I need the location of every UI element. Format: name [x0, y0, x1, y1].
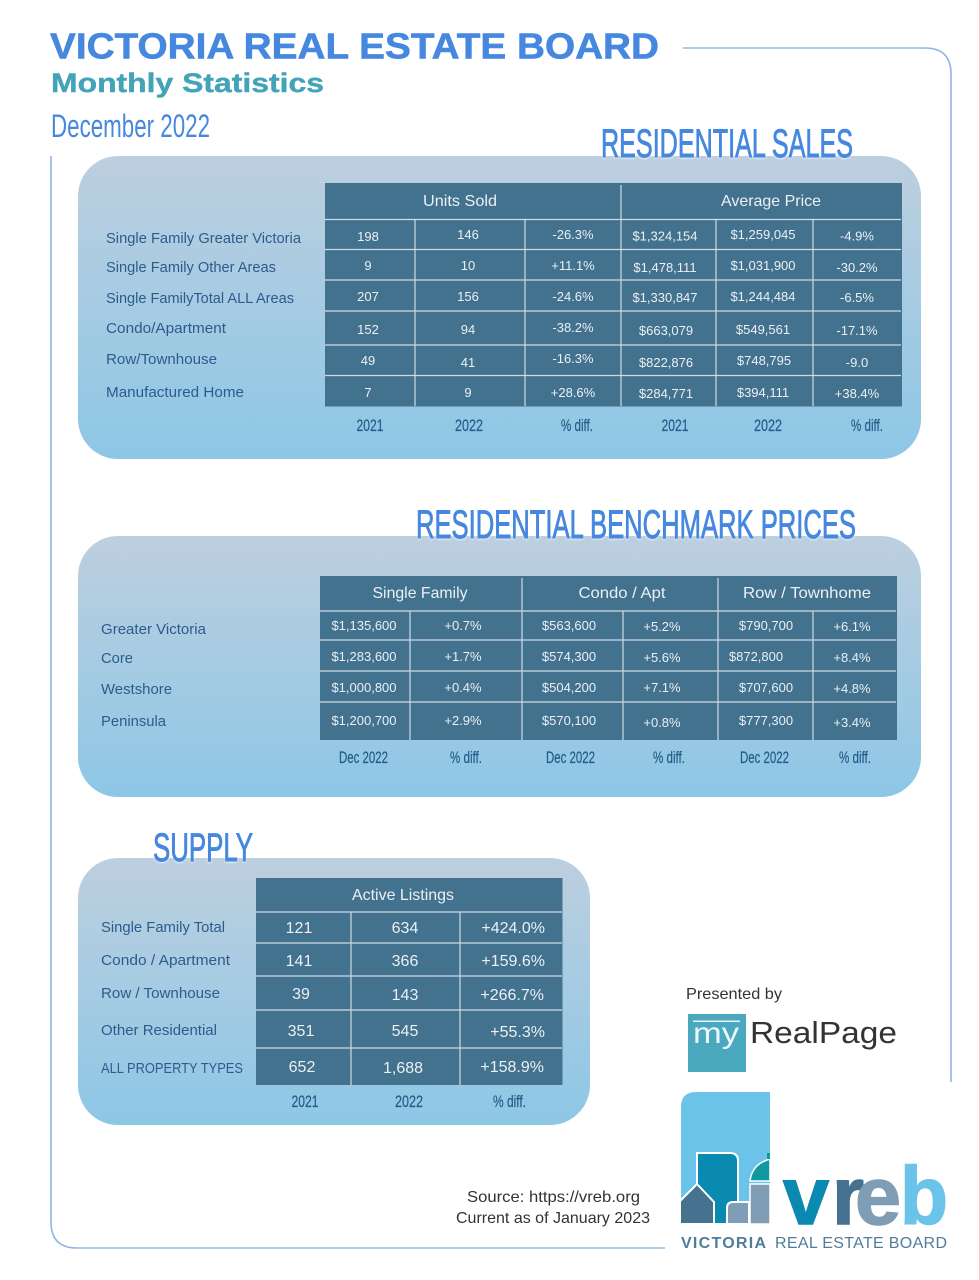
- table values: $1,259,045: [730, 227, 796, 242]
- table headers: Units Sold: [423, 193, 497, 210]
- table values: $790,700: [739, 618, 793, 633]
- source note: [456, 1189, 650, 1227]
- row labels: Single Family Greater Victoria: [106, 230, 302, 247]
- column footers: 2021: [662, 416, 688, 435]
- column footers: 2022: [754, 416, 782, 435]
- subtitle: Monthly Statistics: [51, 68, 324, 98]
- row labels: Row / Townhouse: [101, 985, 220, 1002]
- table header: Active Listings: [352, 887, 454, 904]
- table values: $872,800: [729, 649, 783, 664]
- row labels: Manufactured Home: [106, 384, 244, 401]
- table values: $570,100: [542, 713, 596, 728]
- table values: $1,244,484: [730, 289, 796, 304]
- panel: residential sales: [78, 122, 921, 459]
- column footers: Dec 2022: [740, 748, 789, 767]
- table values: +266.7%: [480, 987, 544, 1004]
- table values: -30.2%: [836, 260, 878, 275]
- table values: $284,771: [639, 386, 693, 401]
- row labels: Single Family Total: [101, 919, 225, 936]
- table values: $563,600: [542, 618, 596, 633]
- table values: +4.8%: [833, 681, 871, 696]
- table values: $1,031,900: [730, 258, 796, 273]
- table values: -16.3%: [552, 351, 594, 366]
- row labels: Greater Victoria: [101, 621, 207, 638]
- table values: 545: [392, 1023, 418, 1040]
- table values: [286, 920, 545, 1077]
- table values: +159.6%: [481, 953, 545, 970]
- table values: $504,200: [542, 680, 596, 695]
- table values: 94: [461, 322, 475, 337]
- table headers: [372, 585, 871, 602]
- presented by: Presented by: [686, 986, 782, 1003]
- table values: $1,135,600: [331, 618, 397, 633]
- column footers: 2022: [395, 1092, 423, 1111]
- table values: 652: [289, 1059, 315, 1076]
- row labels: ALL PROPERTY TYPES: [101, 1060, 243, 1077]
- table values: -6.5%: [840, 290, 874, 305]
- table headers: Single Family: [372, 585, 468, 602]
- table values: 7: [364, 385, 372, 400]
- row labels: Row/Townhouse: [106, 351, 217, 368]
- row labels: Single Family Other Areas: [106, 259, 276, 276]
- table values: +0.4%: [444, 680, 482, 695]
- table values: +7.1%: [643, 680, 681, 695]
- row labels: Condo/Apartment: [106, 320, 227, 337]
- table values: 141: [286, 953, 312, 970]
- column footers: 2021: [292, 1092, 318, 1111]
- table values: -9.0: [846, 355, 868, 370]
- table values: +55.3%: [490, 1024, 545, 1041]
- table values: 143: [392, 987, 418, 1004]
- logo: VREB: e: [855, 1151, 901, 1242]
- table values: [331, 618, 871, 730]
- row labels: [101, 621, 207, 730]
- logo: VREB: VICTORIA: [681, 1235, 766, 1252]
- column footers: Dec 2022: [546, 748, 595, 767]
- column footers: Dec 2022: [339, 748, 388, 767]
- column footers: % diff.: [493, 1092, 526, 1111]
- logo: VREB: v: [783, 1151, 829, 1242]
- table values: 41: [461, 355, 475, 370]
- table headers: Row / Townhome: [743, 585, 871, 602]
- table values: +6.1%: [833, 619, 871, 634]
- column footers: % diff.: [450, 748, 482, 767]
- column footers: % diff.: [839, 748, 871, 767]
- table values: +11.1%: [551, 258, 595, 273]
- column footers: [356, 416, 883, 435]
- table values: +158.9%: [480, 1059, 544, 1076]
- logo: myRealPage: [688, 1014, 897, 1072]
- table values: 207: [357, 289, 379, 304]
- source note: Source: https://vreb.org: [467, 1189, 640, 1206]
- table values: $707,600: [739, 680, 793, 695]
- table: benchmark prices: [320, 576, 897, 740]
- column footers: 2022: [455, 416, 483, 435]
- row labels: [106, 230, 302, 401]
- table values: $1,324,154: [632, 228, 698, 244]
- logo: myRealPage: my: [693, 1017, 739, 1050]
- table values: 634: [392, 920, 418, 937]
- column footers: % diff.: [653, 748, 685, 767]
- table values: $777,300: [739, 713, 793, 728]
- table headers: Condo / Apt: [578, 585, 666, 602]
- row labels: Core: [101, 650, 133, 667]
- table values: 10: [461, 258, 475, 273]
- table values: +2.9%: [444, 713, 482, 728]
- table values: +424.0%: [481, 920, 545, 937]
- table values: 366: [392, 953, 418, 970]
- table values: $574,300: [542, 649, 596, 664]
- table values: $394,111: [737, 385, 789, 400]
- table values: -38.2%: [552, 320, 594, 335]
- table values: 152: [357, 322, 379, 337]
- table values: +5.6%: [643, 650, 681, 665]
- table values: +28.6%: [551, 385, 596, 400]
- table values: 9: [364, 258, 372, 273]
- table values: 1,688: [383, 1060, 423, 1077]
- column footers: % diff.: [561, 416, 593, 435]
- table headers: [423, 193, 821, 210]
- table values: $549,561: [736, 322, 790, 337]
- table values: -26.3%: [552, 227, 594, 242]
- table values: $748,795: [737, 353, 791, 368]
- table values: 156: [457, 289, 479, 304]
- column footers: [339, 748, 871, 767]
- table values: +38.4%: [835, 386, 880, 401]
- table: active listings: [256, 878, 562, 1085]
- row labels: Westshore: [101, 681, 172, 698]
- table values: -24.6%: [552, 289, 594, 304]
- column footers: [292, 1092, 526, 1111]
- table values: $1,478,111: [633, 260, 697, 275]
- table values: $822,876: [639, 355, 693, 370]
- table values: +5.2%: [643, 619, 681, 634]
- row labels: Other Residential: [101, 1022, 217, 1039]
- column footers: 2021: [356, 416, 384, 435]
- table values: -17.1%: [836, 323, 878, 338]
- table values: 198: [357, 229, 379, 244]
- heading: supply: SUPPLY: [153, 826, 253, 870]
- row labels: Condo / Apartment: [101, 952, 231, 969]
- logo: VREB: REAL ESTATE BOARD: [775, 1235, 947, 1252]
- table values: 49: [361, 353, 375, 368]
- table values: -4.9%: [840, 228, 874, 244]
- table values: [357, 227, 880, 401]
- panel: supply: [78, 826, 590, 1125]
- table values: 39: [292, 986, 310, 1003]
- row labels: [101, 919, 243, 1077]
- row labels: Single FamilyTotal ALL Areas: [106, 290, 294, 307]
- logo: VREB: r: [832, 1151, 864, 1242]
- table values: 146: [457, 227, 479, 242]
- table values: +3.4%: [833, 715, 871, 730]
- date: December 2022: [51, 108, 210, 144]
- table values: $663,079: [639, 323, 693, 338]
- table values: +0.8%: [643, 715, 681, 730]
- table values: $1,000,800: [331, 680, 397, 695]
- table values: 351: [288, 1023, 314, 1040]
- table values: $1,330,847: [632, 290, 698, 305]
- column footers: % diff.: [851, 416, 883, 435]
- row labels: Peninsula: [101, 713, 167, 730]
- table headers: Average Price: [721, 193, 821, 210]
- table values: 9: [464, 385, 472, 400]
- logo: VREB: [680, 1092, 948, 1252]
- panel: residential benchmark prices: [78, 503, 921, 797]
- logo: VREB: b: [900, 1151, 948, 1242]
- logo: myRealPage: RealPage: [750, 1015, 897, 1050]
- table values: 121: [286, 920, 312, 937]
- table values: $1,200,700: [331, 713, 397, 728]
- table values: +8.4%: [833, 650, 871, 665]
- table values: +1.7%: [444, 649, 482, 664]
- source note: Current as of January 2023: [456, 1210, 650, 1227]
- title: VICTORIA REAL ESTATE BOARD: [50, 26, 659, 66]
- table values: +0.7%: [444, 618, 482, 633]
- table: sales: [325, 183, 902, 406]
- table values: $1,283,600: [331, 649, 397, 664]
